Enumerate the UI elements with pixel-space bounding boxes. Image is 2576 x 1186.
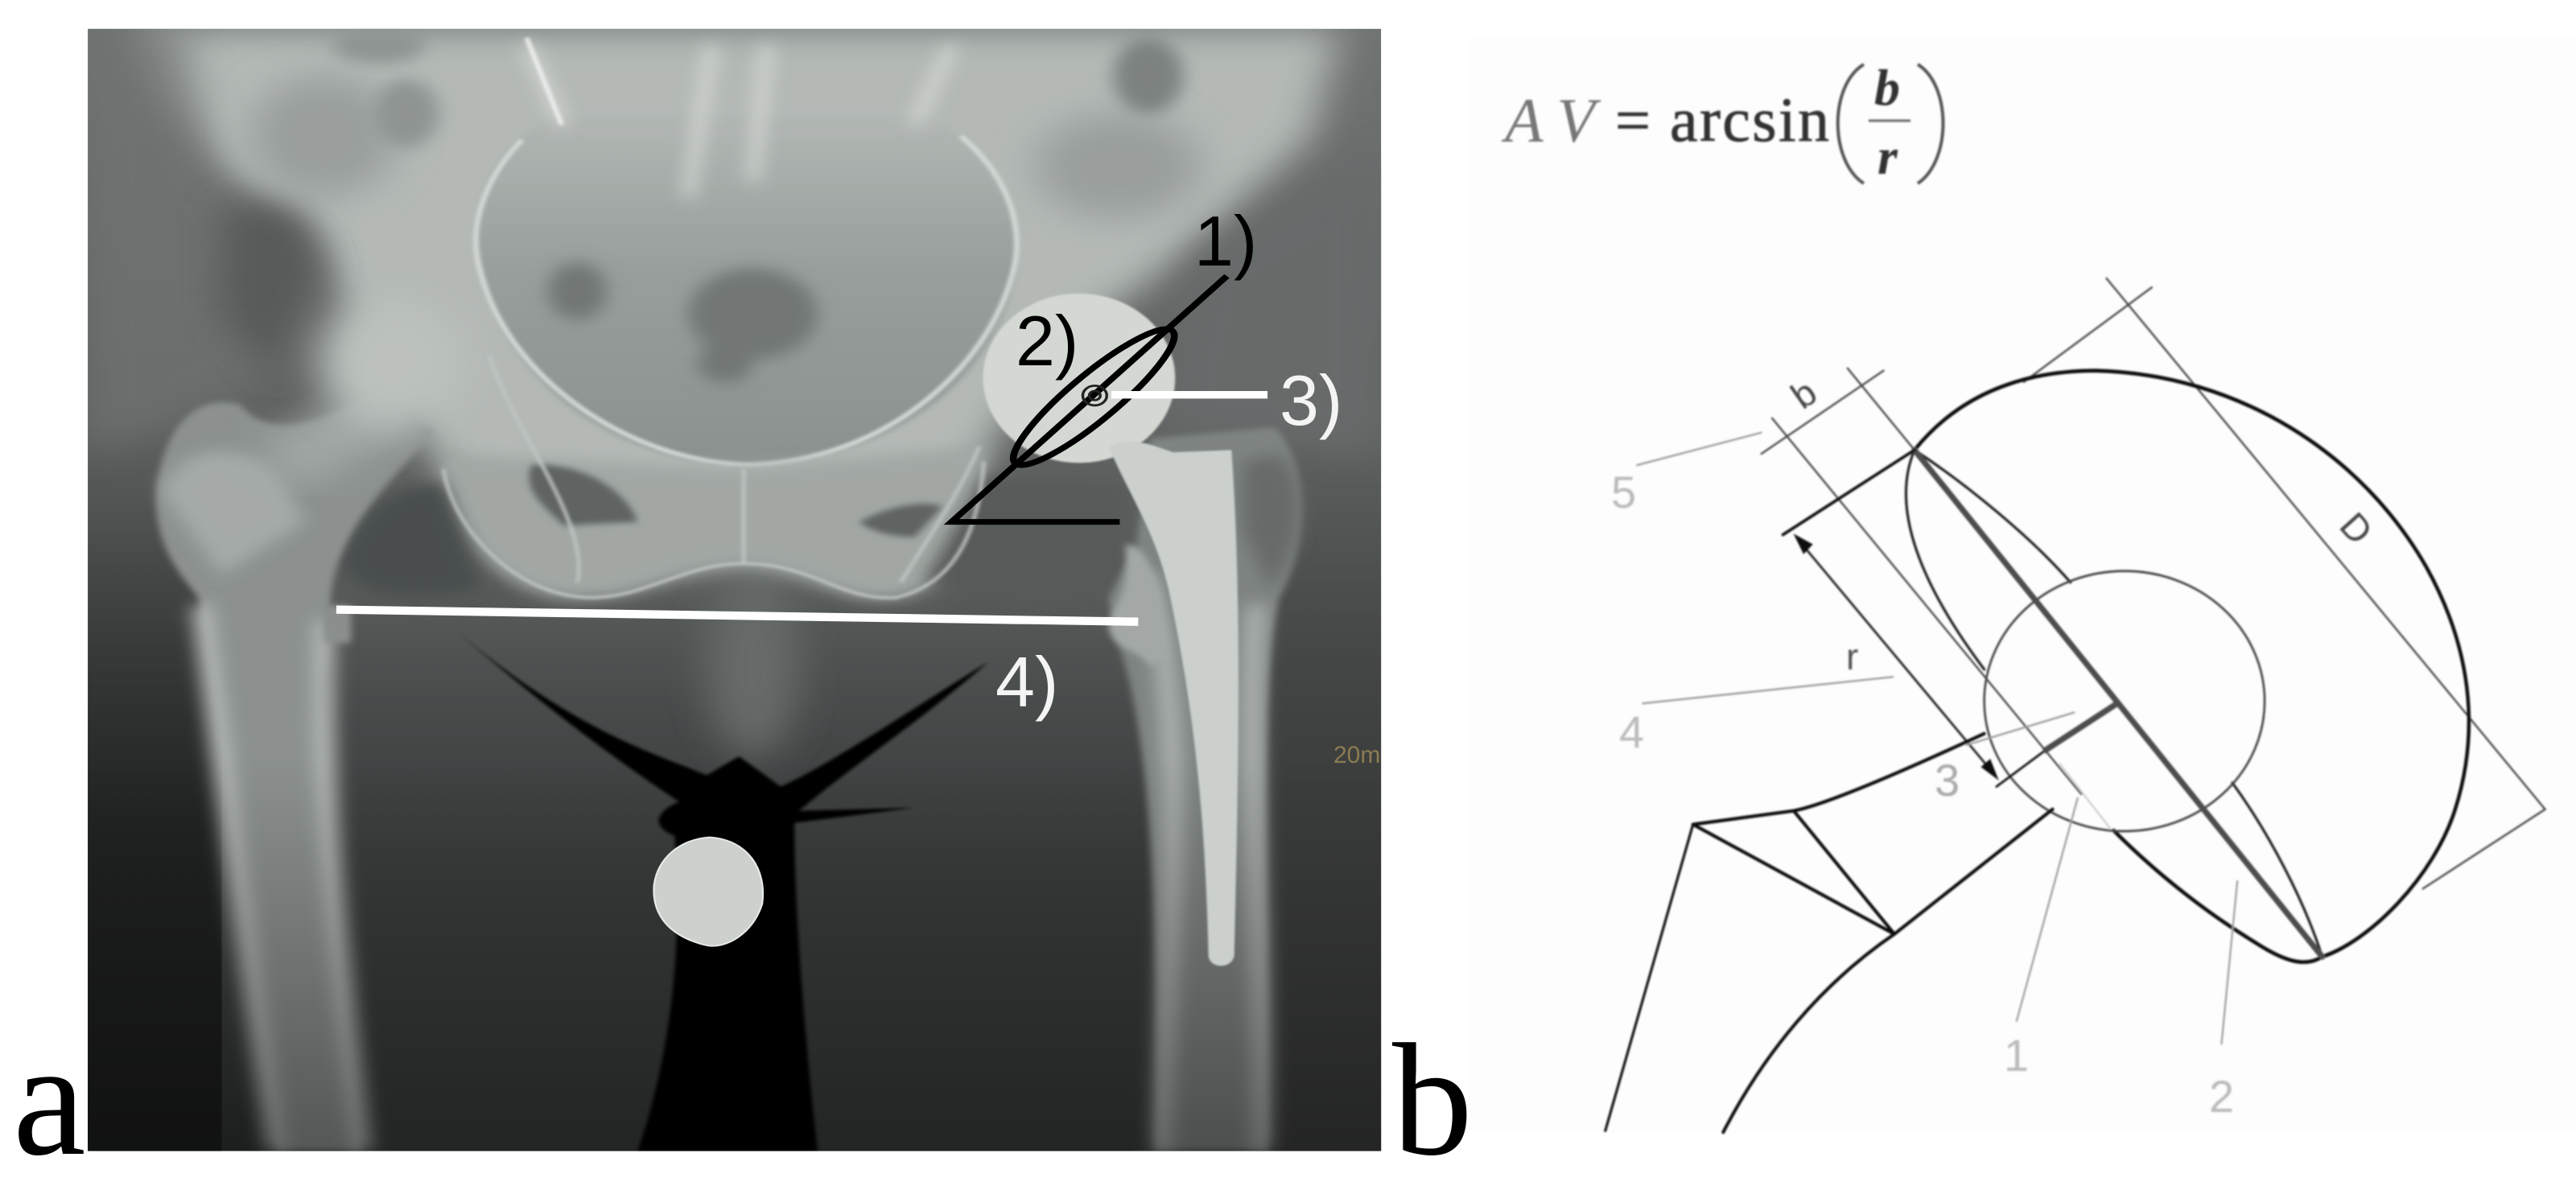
pelvic inlet [478,151,1014,463]
leader lines [1637,433,2237,1044]
label 2: 2) [1016,301,1078,381]
diagram labels: D [2332,504,2380,552]
formula: = [1615,85,1651,155]
reference line: inter-teardrop [336,610,1138,622]
diagram labels [1611,371,2380,1122]
panel letter b: b [1392,1011,1473,1186]
formula: r [1877,128,1898,185]
pubic ring and obturator foramina [443,447,984,599]
right femur [1109,427,1301,1151]
scale marker: 20m [1333,742,1380,768]
measurement: inclination angle lines [951,276,1227,522]
measurement: ellipse centre marker [1082,385,1107,406]
crotch air gap [453,628,988,1151]
formula: arcsin [1670,84,1829,154]
label 3: 3) [1280,360,1342,440]
diagram labels: 4 [1619,706,1644,757]
diagram labels: 1 [2004,1030,2029,1081]
femoral neck and shaft [1693,734,2053,1132]
measurement: cup opening ellipse [997,316,1191,478]
diagram labels: r [1846,636,1858,677]
formula: b [1874,59,1900,116]
inner cup wall [1906,450,2323,957]
icon: gonad shield [654,838,763,946]
x-ray image [88,27,1381,1151]
dimension lines [1762,278,2545,889]
arrow: radius r [1797,538,1995,776]
offset segment [1783,450,1914,535]
panel letter a: a [13,1008,86,1186]
panel b: anteversion diagram [1469,38,2576,1132]
diagram labels: b [1783,371,1824,417]
diagram labels: 3 [1935,755,1960,805]
panel a: pelvic radiograph [13,27,1473,1186]
pointer line to label 3 [1111,391,1267,399]
femoral head circle [1985,571,2265,831]
diagram labels: 5 [1611,467,1636,517]
formula [1501,59,1943,185]
cup opening plane [1914,450,2323,957]
icon: prosthetic femoral head [983,294,1175,463]
diagram: cup, head and neck geometry [1605,278,2545,1132]
icon: femoral stem [1109,442,1239,966]
label 4: 4) [995,642,1058,722]
cup outline [1914,371,2469,962]
label 1: 1) [1194,201,1257,281]
diagram labels: 2 [2209,1071,2234,1122]
formula: AV [1501,85,1601,155]
left hip [156,393,435,1151]
